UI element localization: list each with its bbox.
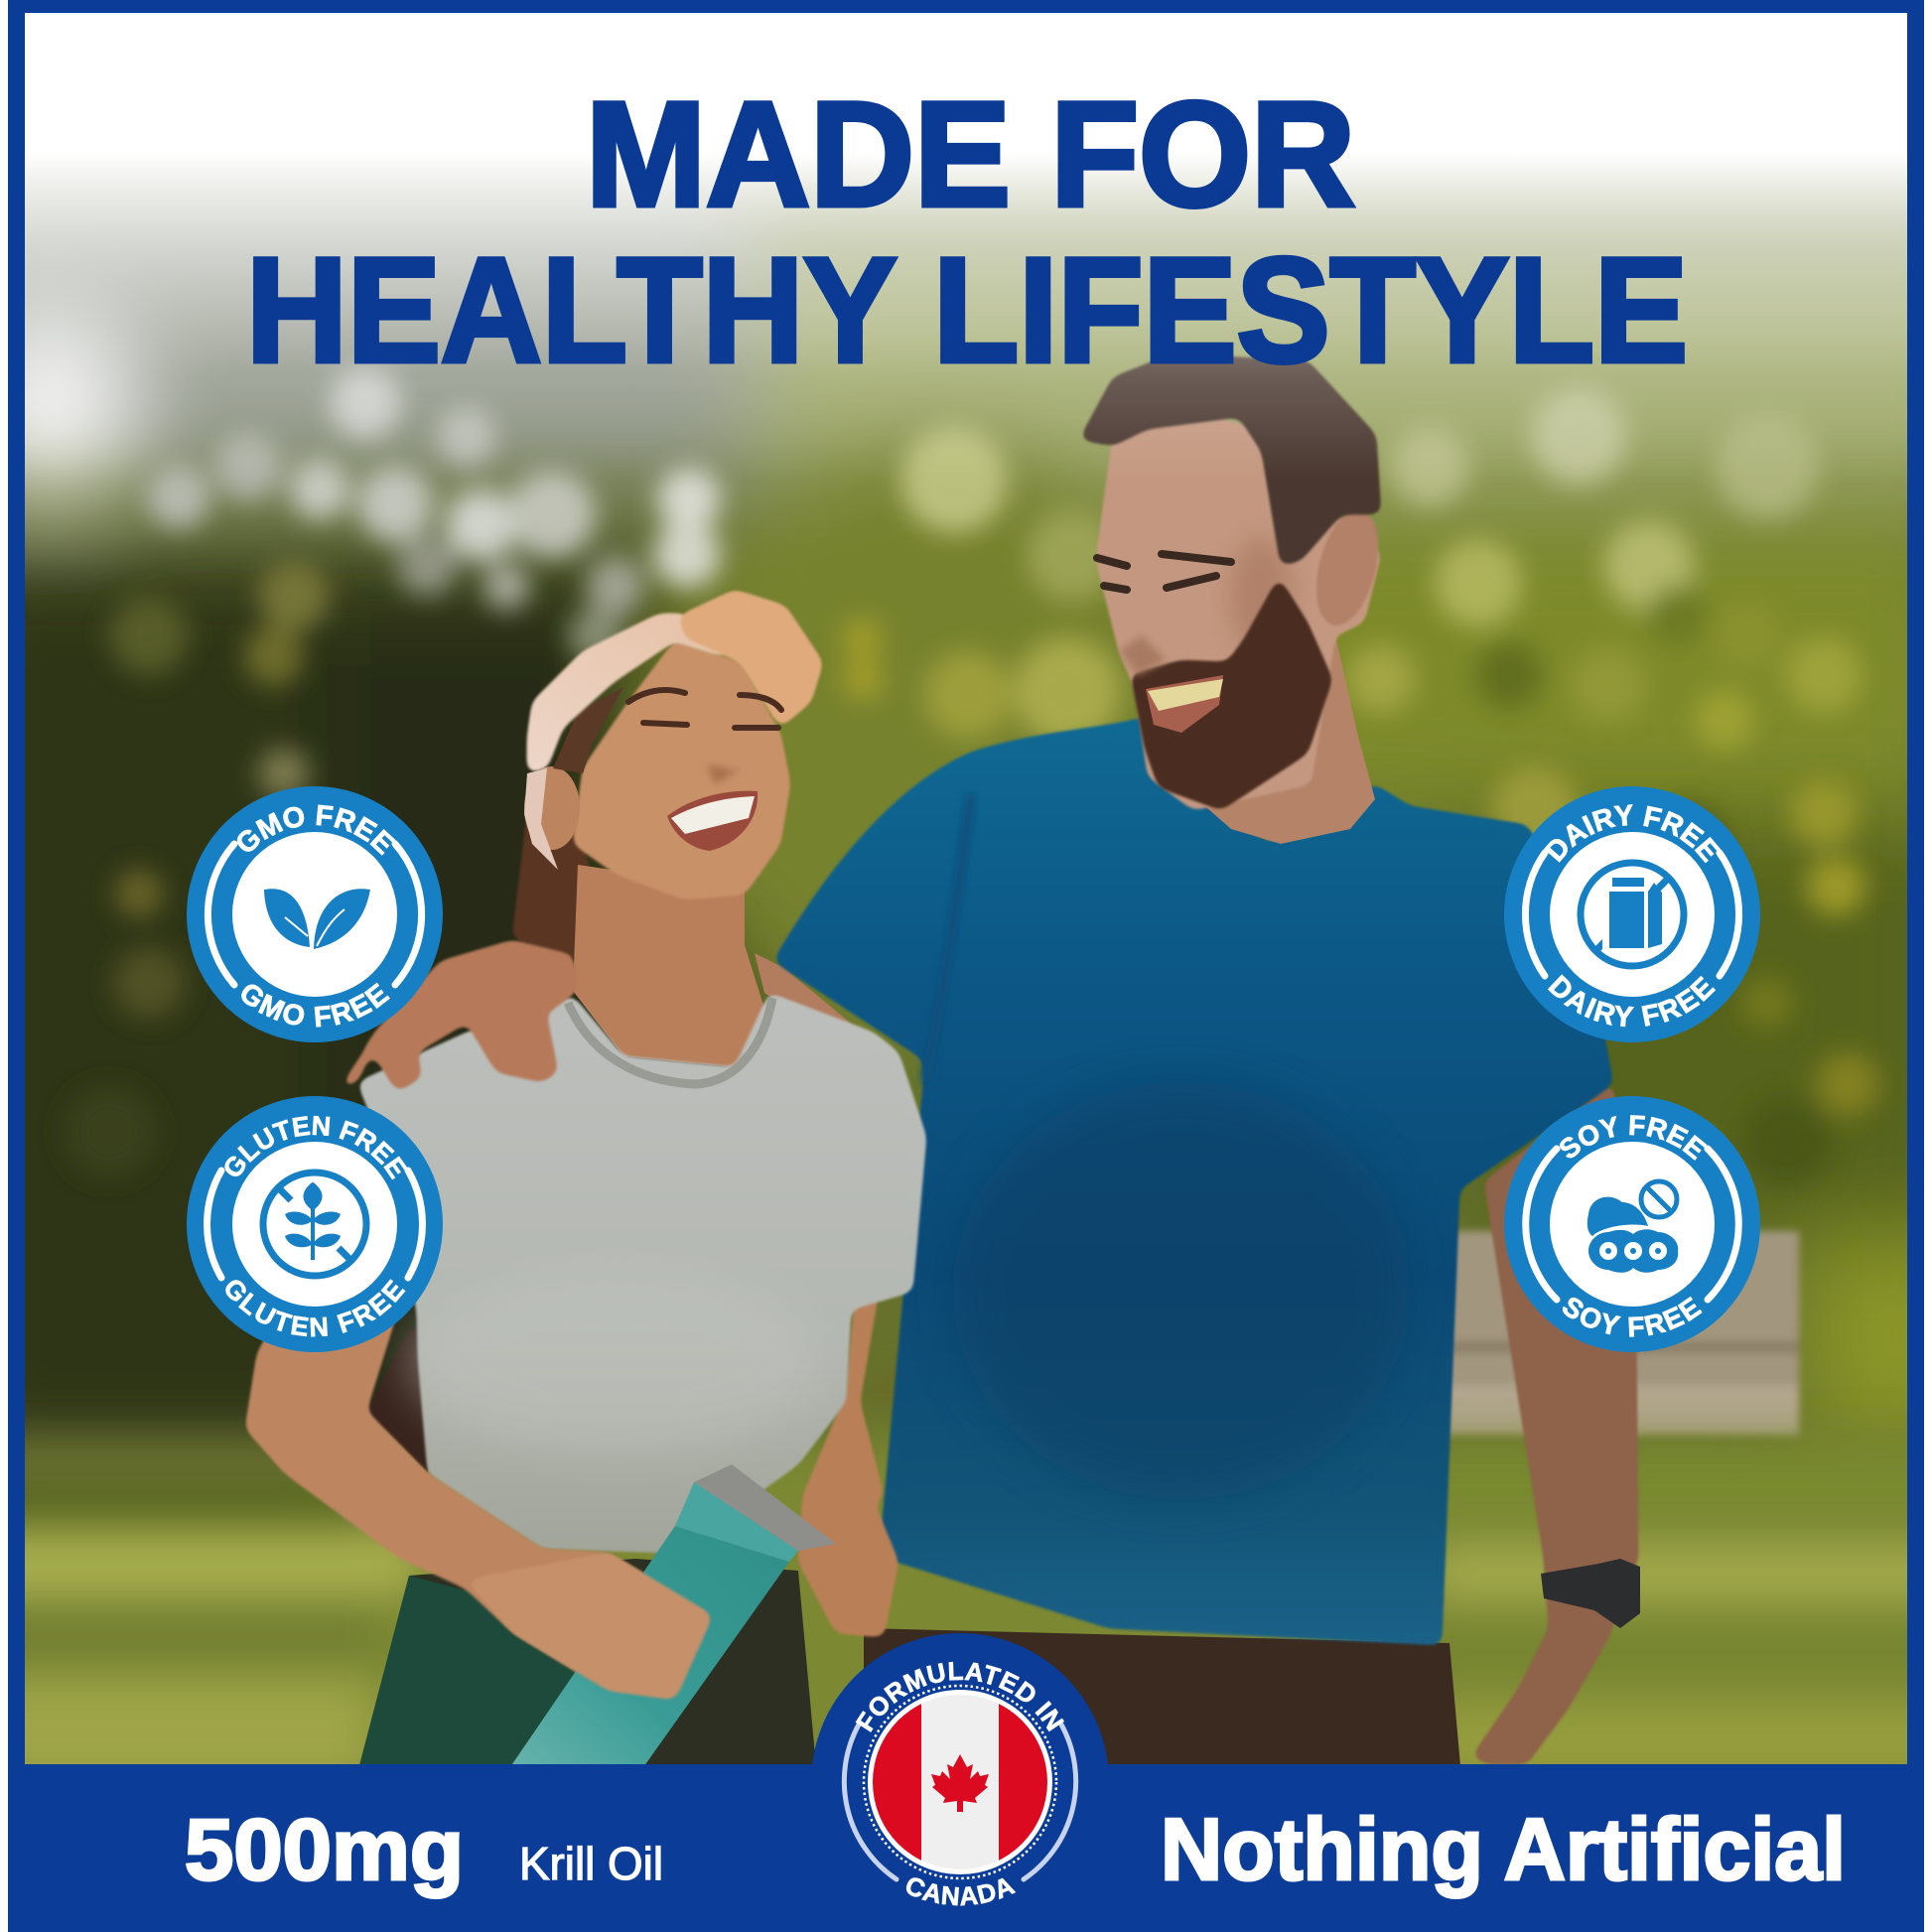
badge ring arcs — [207, 1171, 422, 1278]
woman — [245, 590, 926, 1777]
man's left arm behind woman — [755, 953, 853, 1026]
woman's cap — [524, 590, 823, 870]
title line 1: MADE FOR — [586, 70, 1355, 237]
bottom label: GLUTEN FREE — [225, 1279, 405, 1337]
man's beard — [1131, 577, 1332, 810]
badge: gluten free — [187, 1096, 443, 1352]
icon: crossed-out milk carton — [1581, 863, 1684, 966]
bottom label: DAIRY FREE — [1547, 974, 1716, 1027]
woman's face — [573, 641, 790, 899]
man's eyes and brows — [1097, 554, 1231, 590]
title — [246, 70, 1688, 393]
top label: FORMULATED IN — [856, 1662, 1064, 1732]
title line 2: HEALTHY LIFESTYLE — [246, 226, 1688, 393]
badge: GMO free — [187, 786, 443, 1042]
bottom label: CANADA — [905, 1877, 1017, 1906]
top label: DAIRY FREE — [1544, 804, 1722, 864]
man's cheek shading — [1229, 536, 1293, 655]
man's shorts — [864, 1628, 1461, 1777]
man's mouth and teeth — [1146, 675, 1223, 733]
dark shadow behind arm — [366, 1330, 437, 1473]
woman's near arm — [245, 1281, 713, 1700]
woman's ear — [524, 766, 580, 850]
bottom blue banner — [8, 1764, 1924, 1932]
woman's grey t-shirt — [357, 993, 926, 1553]
badge ring arcs — [1526, 1149, 1738, 1300]
man's right arm and hand — [1471, 1082, 1638, 1764]
man's ear — [1316, 514, 1380, 625]
dotted ring — [864, 1686, 1056, 1878]
neck — [1191, 635, 1375, 844]
man's blue t-shirt — [773, 717, 1613, 1645]
man's nose shadow — [1120, 635, 1167, 675]
bottom text: nothing artificial: Nothing Artificial — [1161, 1800, 1846, 1898]
grass — [0, 1440, 1932, 1797]
man's watch — [1541, 1559, 1640, 1628]
shirt collar — [568, 998, 772, 1084]
water bottle — [503, 1464, 836, 1777]
man's hair — [1079, 354, 1381, 566]
badge ring arcs — [1525, 853, 1739, 976]
woman's shorts — [356, 1559, 817, 1777]
shirt shading — [407, 1271, 824, 1449]
badge blue dome — [811, 1633, 1109, 1931]
top label: SOY FREE — [1560, 1115, 1708, 1161]
bottom text: dosage: 500mg — [185, 1802, 464, 1898]
woman's far hand and forearm — [798, 1291, 898, 1637]
woman's mouth — [667, 791, 758, 851]
woman's neck — [573, 865, 765, 1067]
man — [755, 354, 1640, 1777]
icon: crossed-out wheat — [263, 1173, 366, 1276]
badge: dairy free — [1504, 786, 1760, 1042]
badge ring arcs — [844, 1725, 1076, 1879]
shirt sleeve seam — [925, 794, 971, 1082]
icon: leaves — [264, 889, 370, 949]
background cabin — [1440, 1231, 1799, 1436]
shirt fold shadows — [973, 1086, 1390, 1487]
woman's eyes and brows — [628, 690, 781, 728]
Canadian flag roundel — [864, 1688, 1056, 1876]
icon: maple leaf — [931, 1754, 989, 1812]
woman's hair at temple — [553, 687, 623, 773]
badge ring arcs — [207, 844, 422, 985]
bottom text: krill oil: Krill Oil — [519, 1838, 663, 1889]
top label: GMO FREE — [236, 804, 395, 856]
badge: formulated in Canada — [811, 1633, 1109, 1931]
icon: soybean pod with no symbol — [1587, 1181, 1678, 1273]
badge: soy free — [1504, 1096, 1760, 1352]
man's face — [1096, 407, 1381, 810]
woman's ponytail — [512, 794, 596, 961]
white haze fading from the top — [25, 13, 1907, 480]
woman's hand on bottle — [466, 1553, 713, 1700]
bottom label: GMO FREE — [241, 983, 390, 1028]
top label: GLUTEN FREE — [224, 1116, 407, 1179]
bottom label: SOY FREE — [1563, 1297, 1703, 1337]
man's hand on woman's shoulder — [338, 940, 578, 1092]
woman's nose shadow — [707, 764, 740, 784]
